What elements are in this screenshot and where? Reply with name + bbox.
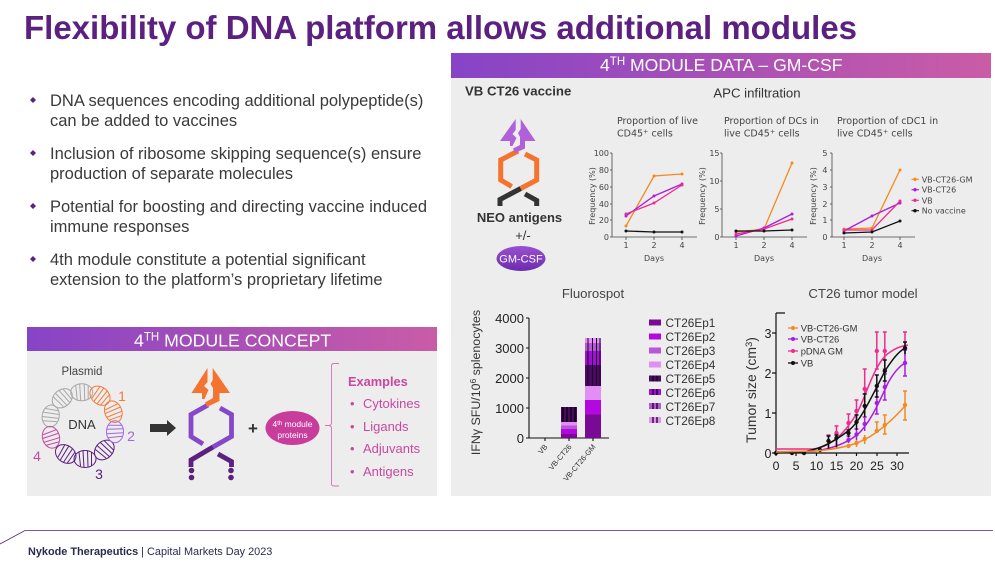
chart: CT26 tumor model: 30: [890, 459, 904, 473]
plasmid DNA diagram: Plasmid: [62, 366, 102, 378]
heading: 4th module concept: MODULE CONCEPT: [159, 330, 331, 350]
chart: proportion of live CD45+ cells: [588, 116, 698, 263]
chart: CT26 tumor model: 3: [744, 342, 755, 347]
chart: CT26 tumor model: 15: [830, 459, 843, 473]
label: plus minus: +/-: [515, 228, 531, 243]
footer: Nykode Therapeutics | Capital Markets Day 2023: [28, 546, 272, 558]
legend: APC infiltration: VB-CT26-GM: [922, 175, 973, 184]
legend: Fluorospot epitopes: CT26Ep8: [666, 414, 716, 428]
chart: proportion of cDC1: 2: [822, 200, 828, 209]
chart: proportion of DCs: 4: [789, 241, 795, 250]
arrow: [150, 420, 176, 436]
legend: Fluorospot epitopes: CT26Ep3: [666, 344, 716, 358]
plasmid DNA diagram: 4: [33, 448, 41, 464]
chart: Fluorospot stacked bars: 4000: [495, 311, 524, 326]
legend: APC infiltration: [912, 175, 973, 216]
legend: APC infiltration: VB-CT26: [922, 186, 956, 195]
heading: APC infiltration: APC infiltration: [713, 86, 801, 100]
chart: proportion of DCs: live CD45: [724, 128, 770, 140]
bullet list: 4th module constitute a potential significant: [50, 251, 366, 269]
chart: proportion of DCs: 5: [714, 205, 720, 214]
examples list: [348, 374, 421, 479]
chart: proportion of live CD45+ cells: +: [643, 128, 648, 136]
heading: 4th module data GM-CSF: TH: [610, 56, 625, 68]
icon: NEO antigens vaccine: [500, 119, 537, 206]
chart: proportion of cDC1: +: [883, 128, 888, 136]
bracket: [325, 364, 339, 486]
examples list: Antigens: [363, 464, 414, 479]
chart: Fluorospot stacked bars: VB-CT26: [547, 443, 574, 472]
chart: proportion of cDC1: 1: [822, 216, 828, 225]
bullet list: can be added to vaccines: [50, 112, 237, 130]
chart: proportion of live CD45+ cells: 100: [594, 149, 609, 158]
legend: Fluorospot epitopes: [649, 316, 716, 428]
title: Flexibility of DNA platform allows additional modules: [24, 9, 857, 46]
chart: Fluorospot stacked bars: [468, 286, 624, 483]
oval: 4th module proteins: [266, 411, 320, 445]
plasmid DNA diagram: 2: [127, 428, 135, 444]
bullet list: [30, 92, 427, 289]
chart: proportion of cDC1: 5: [822, 149, 828, 158]
heading: 4th module concept: TH: [144, 332, 159, 344]
plus sign: +: [248, 419, 258, 438]
chart: Fluorospot stacked bars: VB-CT26-GM: [561, 443, 598, 483]
chart: proportion of cDC1: Frequency (%): [809, 167, 818, 225]
chart: proportion of cDC1: 3: [822, 183, 828, 192]
chart: Fluorospot stacked bars: IFNγ SFU/10: [469, 384, 483, 455]
chart: proportion of DCs: 15: [709, 149, 720, 158]
chart: Fluorospot stacked bars: splenocytes: [469, 310, 483, 379]
chart: proportion of cDC1: 2: [869, 241, 875, 250]
chart: CT26 tumor model: 3: [765, 327, 772, 341]
chart: proportion of cDC1: 0: [822, 233, 828, 242]
chart: proportion of DCs: [698, 116, 819, 263]
chart: proportion of cDC1: 4: [897, 241, 903, 250]
chart: proportion of cDC1: live CD45: [837, 128, 883, 140]
chart: proportion of live CD45+ cells: 4: [679, 241, 685, 250]
chart: CT26 tumor model: ): [743, 337, 759, 342]
chart: proportion of DCs: +: [770, 128, 775, 136]
examples list: Examples: [348, 374, 408, 389]
chart: CT26 tumor model: 2: [765, 367, 772, 381]
chart: proportion of cDC1: [809, 116, 938, 263]
examples list: •: [350, 396, 355, 411]
oval: 4th module proteins: th: [277, 421, 282, 427]
bullet list: extension to the platform’s proprietary lifetime: [50, 271, 383, 289]
bullet list: Inclusion of ribosome skipping sequence(s) ensure: [50, 145, 421, 163]
chart: proportion of live CD45+ cells: 80: [599, 166, 609, 175]
chart: proportion of DCs: Frequency (%): [698, 167, 707, 225]
chart: CT26 tumor model: 0: [773, 459, 780, 473]
bullet list: DNA sequences encoding additional polypeptide(s): [50, 92, 423, 110]
oval: GM-CSF: GM-CSF: [499, 254, 543, 266]
examples list: •: [350, 419, 355, 434]
chart: proportion of DCs: 1: [733, 241, 739, 250]
chart: proportion of live CD45+ cells: cells: [648, 128, 673, 140]
legend: tumor model: VB: [801, 358, 813, 368]
examples list: •: [350, 464, 355, 479]
chart: proportion of DCs: Days: [754, 254, 774, 263]
legend: tumor model: [788, 322, 858, 368]
plasmid DNA diagram: [33, 366, 135, 482]
legend: tumor model: VB-CT26-GM: [801, 322, 858, 334]
chart: Fluorospot stacked bars: 0: [517, 431, 524, 446]
subheading: VB CT26 vaccine: VB CT26 vaccine: [465, 84, 571, 98]
legend: tumor model: pDNA GM: [801, 346, 843, 356]
chart: CT26 tumor model: [743, 286, 918, 473]
chart: proportion of cDC1: 4: [822, 166, 828, 175]
chart: Fluorospot stacked bars: 6: [468, 378, 478, 384]
chart: proportion of cDC1: cells: [888, 128, 913, 140]
legend: Fluorospot epitopes: CT26Ep7: [666, 400, 715, 414]
chart: proportion of DCs: cells: [775, 128, 800, 140]
chart: proportion of DCs: 0: [714, 233, 720, 242]
chart: proportion of live CD45+ cells: Frequency (%): [588, 167, 597, 225]
chart: proportion of live CD45+ cells: Proportion of live: [617, 116, 698, 127]
series: VB: [774, 342, 907, 455]
legend: Fluorospot epitopes: CT26Ep2: [666, 330, 715, 344]
chart: Fluorospot stacked bars: 2000: [495, 371, 524, 386]
chart: proportion of live CD45+ cells: CD45: [617, 128, 643, 140]
legend: Fluorospot epitopes: CT26Ep5: [666, 372, 716, 386]
series: VB-CT26-GM: [776, 391, 907, 452]
oval: 4th module proteins: module: [282, 419, 313, 429]
chart: CT26 tumor model: Tumor size (cm: [743, 347, 759, 443]
chart: Fluorospot stacked bars: Fluorospot: [562, 286, 624, 301]
legend: APC infiltration: No vaccine: [922, 207, 966, 216]
chart: proportion of cDC1: 1: [841, 241, 847, 250]
bullet list: Potential for boosting and directing vaccine induced: [50, 198, 427, 216]
chart: proportion of live CD45+ cells: 40: [599, 200, 609, 209]
legend: Fluorospot epitopes: CT26Ep1: [666, 316, 715, 330]
chart: CT26 tumor model: 1: [765, 407, 772, 421]
oval: 4th module proteins: 4: [272, 419, 277, 429]
examples list: Cytokines: [363, 396, 421, 411]
chart: proportion of cDC1: Days: [862, 254, 882, 263]
oval: 4th module proteins: proteins: [277, 430, 308, 440]
examples list: •: [350, 441, 355, 456]
plasmid DNA diagram: DNA: [68, 417, 96, 432]
examples list: Ligands: [363, 419, 409, 434]
chart: proportion of live CD45+ cells: 1: [623, 241, 629, 250]
examples list: Adjuvants: [363, 441, 421, 456]
chart: proportion of DCs: 10: [709, 177, 720, 186]
chart: Fluorospot stacked bars: VB: [536, 443, 550, 456]
chart: CT26 tumor model: 25: [870, 459, 884, 473]
legend: tumor model: VB-CT26: [801, 334, 839, 344]
bullet list: immune responses: [50, 218, 189, 236]
legend: APC infiltration: VB: [922, 196, 933, 205]
plasmid DNA diagram: 1: [118, 388, 126, 404]
chart: proportion of live CD45+ cells: 20: [599, 216, 609, 225]
chart: proportion of live CD45+ cells: 2: [651, 241, 657, 250]
chart: CT26 tumor model: 5: [793, 459, 800, 473]
chart: CT26 tumor model: 0: [765, 447, 772, 461]
legend: Fluorospot epitopes: CT26Ep6: [666, 386, 716, 400]
panel: 4th module data: [451, 53, 991, 496]
oval: GM-CSF: [496, 246, 546, 271]
heading: 4th module data GM-CSF: MODULE DATA – GM-CSF: [625, 55, 843, 75]
chart: CT26 tumor model: 10: [810, 459, 823, 473]
bullet list: production of separate molecules: [50, 165, 293, 183]
chart: proportion of live CD45+ cells: 60: [599, 183, 609, 192]
chart: proportion of live CD45+ cells: 0: [604, 233, 609, 242]
chart: Fluorospot stacked bars: 1000: [495, 401, 524, 416]
chart: Fluorospot stacked bars: 3000: [495, 341, 524, 356]
chart: CT26 tumor model: CT26 tumor model: [808, 286, 918, 301]
chart: proportion of cDC1: Proportion of cDC1 in: [837, 116, 938, 127]
heading: 4th module concept: 4: [134, 330, 144, 350]
heading: 4th module data GM-CSF: 4: [600, 55, 610, 75]
icon: 4th module vaccine molecule: [189, 368, 234, 480]
series: VB-CT26: [776, 350, 907, 452]
plasmid DNA diagram: 3: [95, 466, 103, 482]
series: pDNA GM: [776, 332, 908, 450]
legend: Fluorospot epitopes: CT26Ep4: [666, 358, 716, 372]
label: NEO antigens: NEO antigens: [477, 210, 562, 225]
chart: proportion of live CD45+ cells: Days: [644, 254, 664, 263]
panel: 4th module concept: [27, 327, 437, 496]
chart: proportion of DCs: Proportion of DCs in: [724, 116, 819, 127]
chart: proportion of DCs: 2: [761, 241, 767, 250]
chart: CT26 tumor model: 20: [850, 459, 863, 473]
